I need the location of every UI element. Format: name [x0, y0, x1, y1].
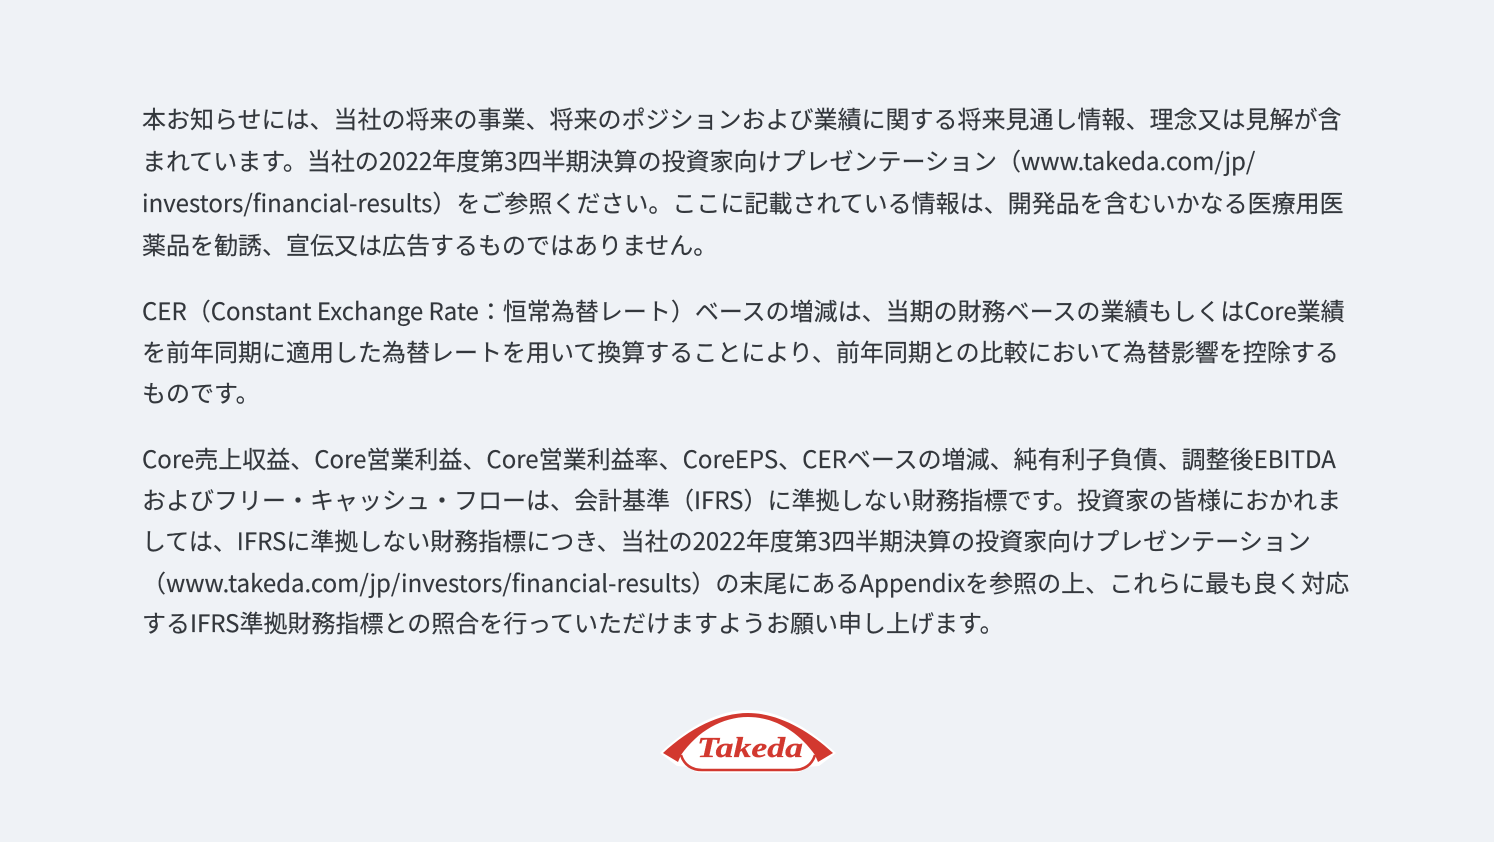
text block: non-IFRS measures note: （www.takeda.com/jp/investors/financial-results）の末尾にあるAppendixを参照の上、これらに最も良く対応	[142, 564, 1349, 599]
text block: non-IFRS measures note: Core売上収益、Core営業利益、Core営業利益率、CoreEPS、CERベースの増減、純有利子負債、調整後EBITDA	[142, 440, 1336, 475]
text block: forward-looking statement notice	[142, 100, 1344, 261]
text block: non-IFRS measures note: するIFRS準拠財務指標との照合を行っていただけますようお願い申し上げます。	[142, 604, 1004, 639]
logo white backing	[660, 710, 836, 773]
text block: CER definition: を前年同期に適用した為替レートを用いて換算することにより、前年同期との比較において為替影響を控除する	[142, 333, 1339, 368]
text block: forward-looking statement notice: まれています。当社の2022年度第3四半期決算の投資家向けプレゼンテーション（www.takeda.com/jp/	[142, 142, 1255, 177]
text block: non-IFRS measures note	[142, 440, 1349, 639]
logo wordmark: Takeda	[697, 732, 803, 764]
text block: forward-looking statement notice: investors/financial-results）をご参照ください。ここに記載されている情報は、開発品を含むいかなる医療用医	[142, 184, 1344, 219]
text block: non-IFRS measures note: しては、IFRSに準拠しない財務指標につき、当社の2022年度第3四半期決算の投資家向けプレゼンテーション	[142, 522, 1311, 557]
text block: CER definition: CER（Constant Exchange Rate：恒常為替レート）ベースの増減は、当期の財務ベースの業績もしくはCore業績	[142, 292, 1345, 327]
text block: non-IFRS measures note: およびフリー・キャッシュ・フローは、会計基準（IFRS）に準拠しない財務指標です。投資家の皆様におかれま	[142, 481, 1341, 516]
logo red arch	[663, 713, 833, 762]
text block: forward-looking statement notice: 薬品を勧誘、宣伝又は広告するものではありません。	[142, 226, 717, 261]
logo red lower frame	[681, 755, 815, 770]
text block: forward-looking statement notice: 本お知らせには、当社の将来の事業、将来のポジションおよび業績に関する将来見通し情報、理念又は見解が含	[142, 100, 1342, 135]
text block: CER definition: ものです。	[142, 374, 260, 409]
icon: Takeda logo	[660, 710, 836, 773]
text block: CER definition	[142, 292, 1345, 409]
